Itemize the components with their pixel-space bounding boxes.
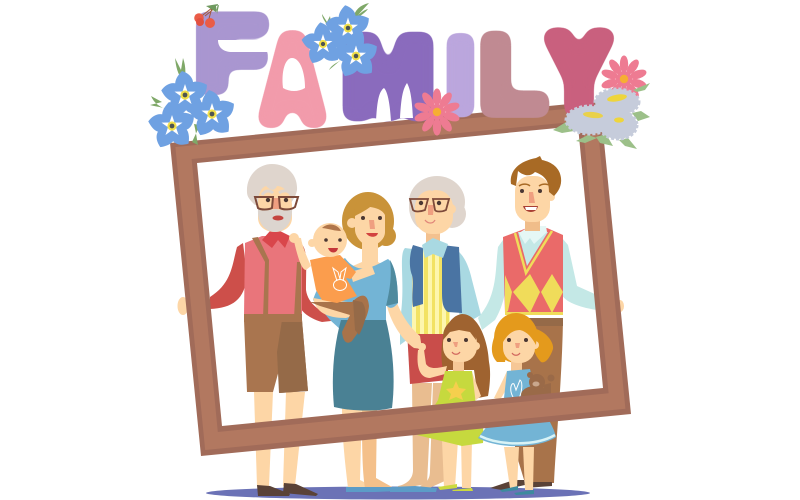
pink flower right [600, 56, 648, 102]
baby [289, 223, 375, 343]
blue flower cluster left [146, 58, 237, 151]
icon: red berries [194, 4, 219, 28]
mother [313, 192, 422, 492]
picture frame [170, 101, 631, 456]
girl with green dress [417, 314, 490, 491]
blue flower cluster top [300, 3, 380, 80]
grandmother [390, 176, 481, 492]
father [478, 156, 624, 490]
title: FAMILY lettering: F [197, 0, 265, 110]
girl with blue dress and teddy bear [478, 313, 556, 495]
pink flower on frame [413, 88, 461, 136]
title: FAMILY lettering: M [344, 18, 432, 136]
title: FAMILY lettering: Y [550, 16, 608, 130]
title: FAMILY lettering: A [263, 17, 322, 142]
title: FAMILY lettering: L [481, 17, 545, 133]
ground shadow [206, 486, 590, 500]
title: FAMILY lettering: I [446, 18, 475, 134]
grey daisy cluster [553, 83, 650, 149]
grandfather [178, 164, 340, 496]
title: FAMILY lettering [197, 0, 608, 142]
